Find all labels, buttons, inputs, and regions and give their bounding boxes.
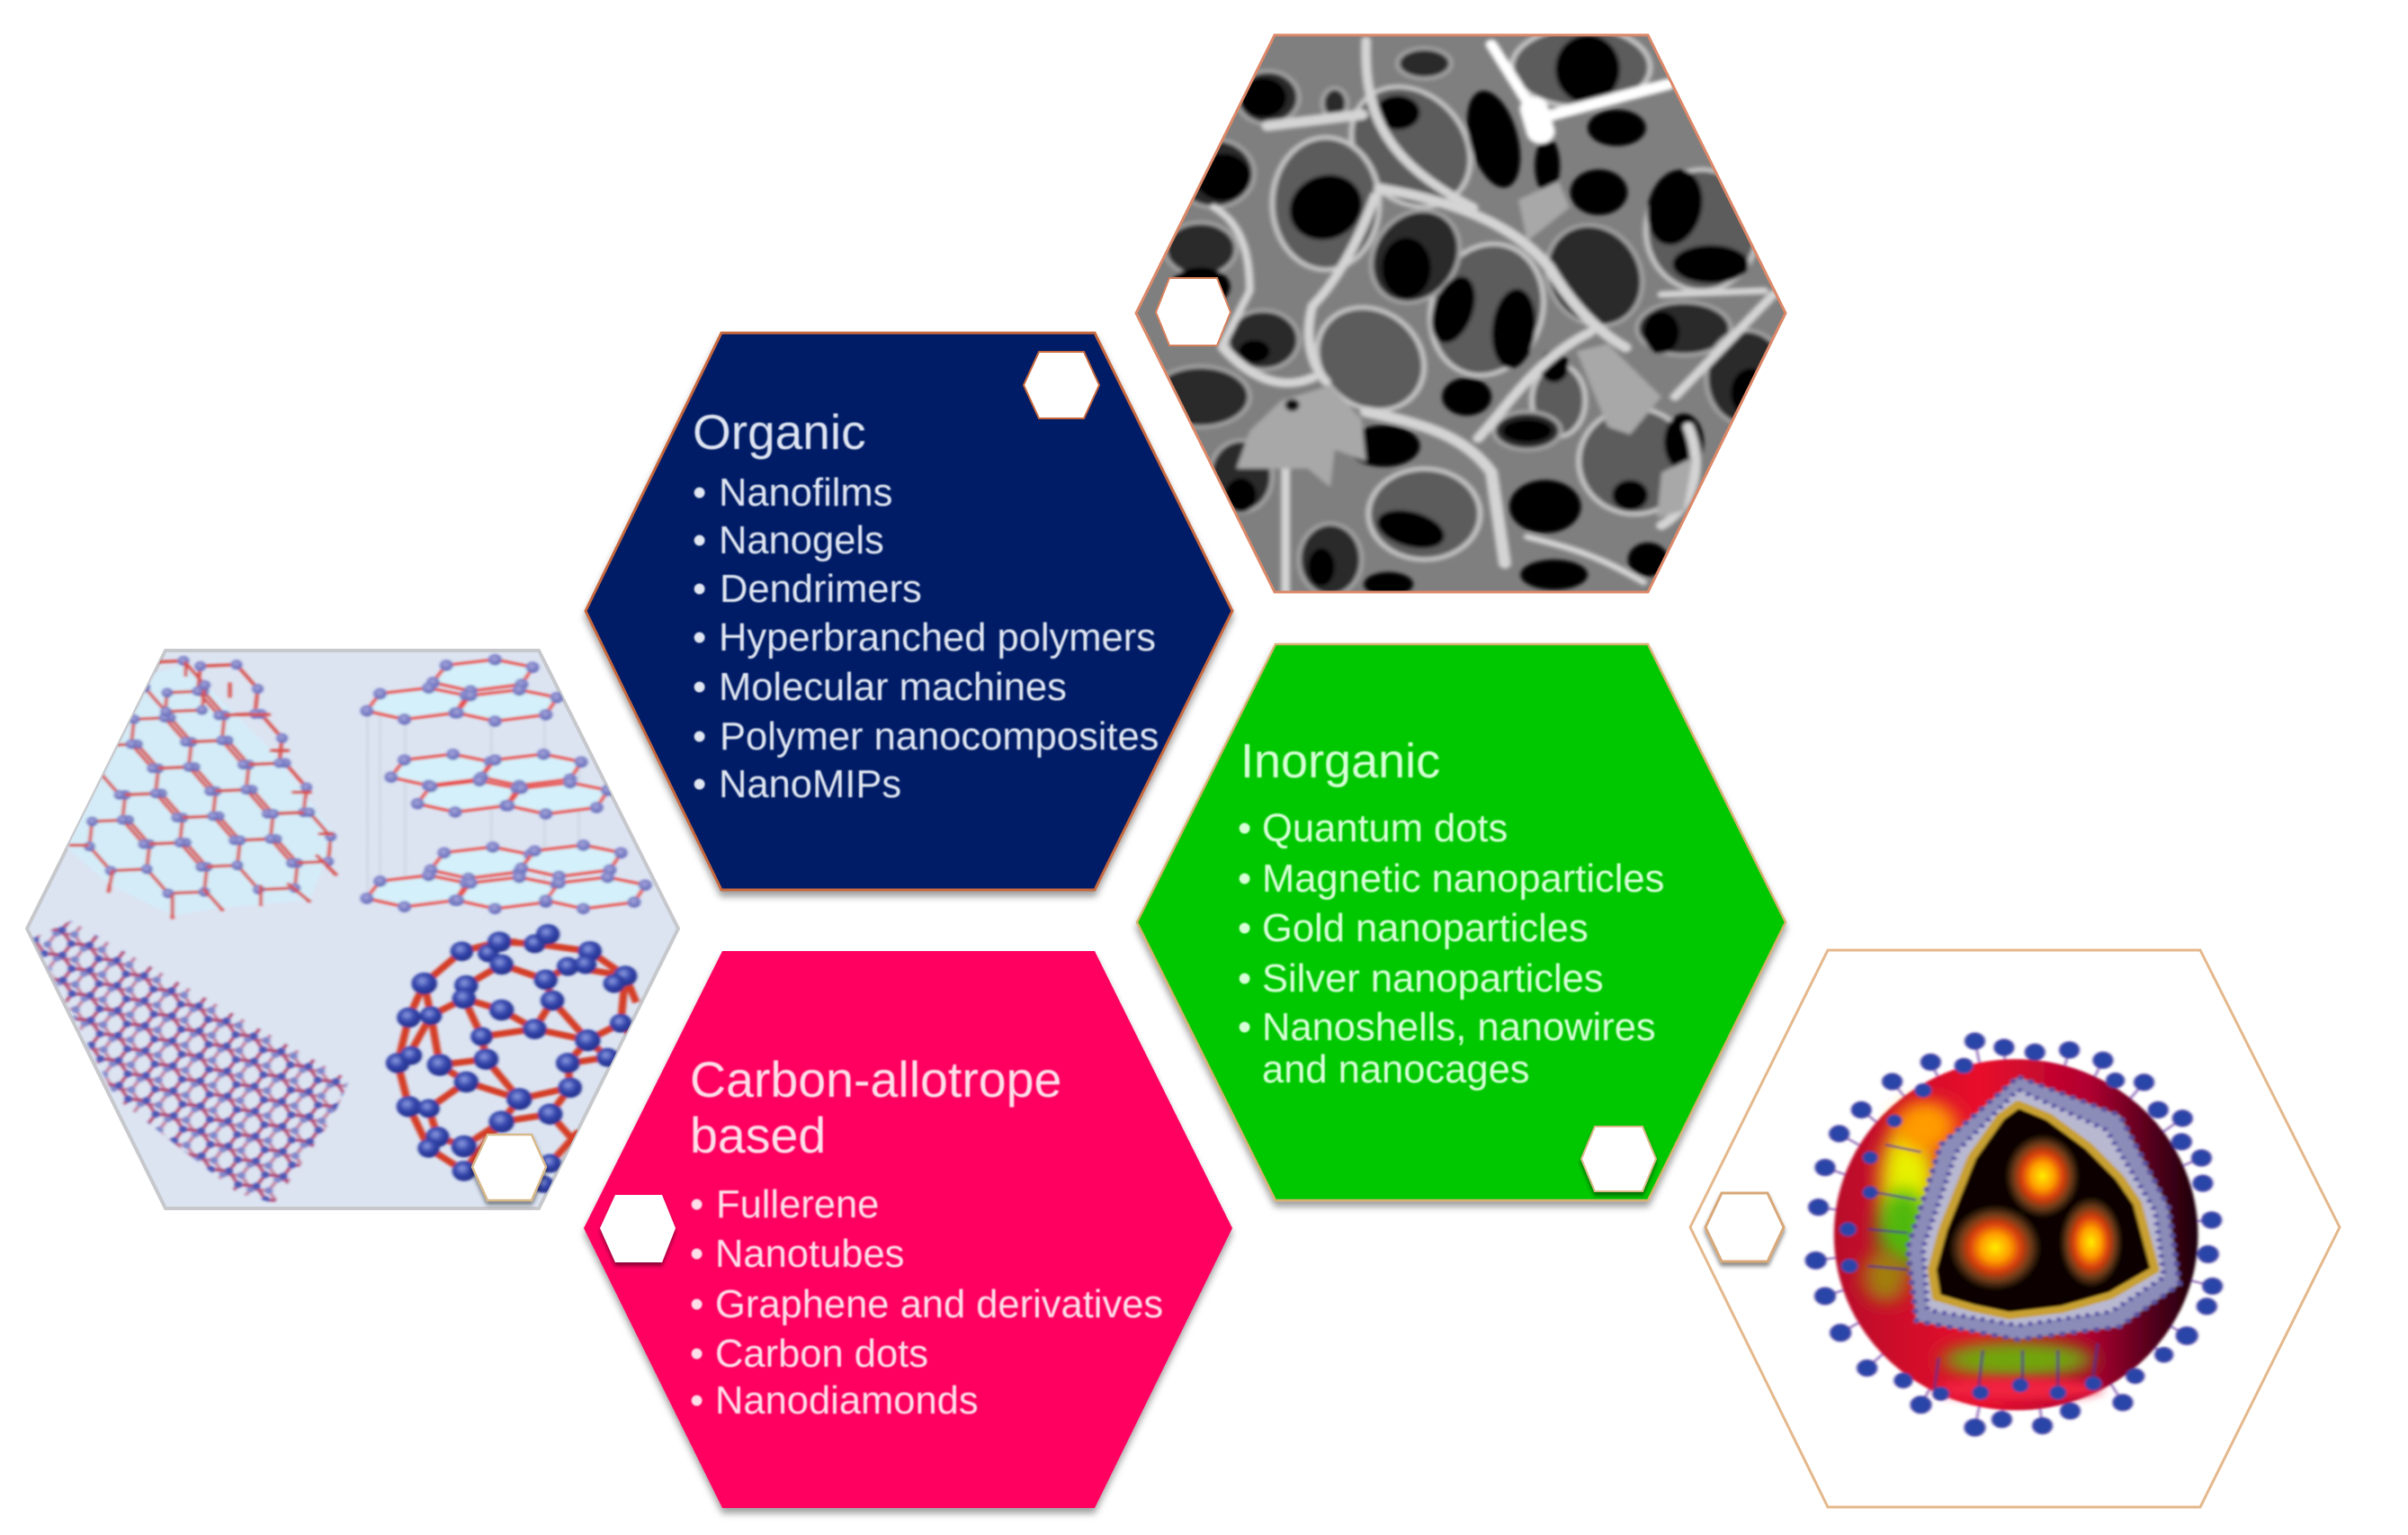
badge: organic: [1024, 352, 1099, 418]
list: inorganic items: Quantum dots: [1262, 807, 1508, 850]
image panel: core-shell nanoparticle: [1690, 950, 2340, 1507]
list: organic items: •: [693, 568, 706, 611]
shell: [1834, 1059, 2198, 1410]
badge: foam panel: [1156, 278, 1231, 346]
list: carbon items: Nanodiamonds: [715, 1379, 979, 1423]
list: organic items: •: [693, 471, 706, 515]
list: inorganic items: •: [1238, 857, 1251, 901]
membrane: [1908, 1077, 2180, 1340]
badge: nanoparticle panel: [1705, 1193, 1784, 1261]
list: organic items: Nanogels: [719, 519, 884, 562]
list: inorganic items: and nanocages: [1262, 1048, 1530, 1091]
list: inorganic items: •: [1238, 957, 1251, 1001]
list: organic items: Dendrimers: [720, 568, 922, 611]
list: carbon items: Nanotubes: [715, 1233, 904, 1276]
list: carbon items: •: [690, 1183, 703, 1226]
core: [1932, 1104, 2155, 1315]
list: organic items: •: [693, 519, 706, 562]
heading: Carbon-allotrope based: Carbon-allotrope: [690, 1052, 1061, 1108]
list: carbon items: •: [690, 1379, 703, 1423]
list: inorganic items: •: [1238, 907, 1251, 950]
list: organic items: •: [693, 616, 706, 660]
list: inorganic items: Silver nanoparticles: [1262, 957, 1604, 1001]
panel: carbon-allotrope based: [584, 951, 1232, 1508]
list: organic items: •: [693, 763, 706, 806]
list: inorganic items: •: [1238, 1006, 1251, 1049]
list: organic items: Hyperbranched polymers: [719, 616, 1156, 660]
list: organic items: Molecular machines: [719, 666, 1067, 709]
graphene sheet: [67, 656, 336, 919]
list: inorganic items: •: [1238, 807, 1251, 850]
list: inorganic items: Nanoshells, nanowires: [1262, 1006, 1656, 1049]
heading: Carbon-allotrope based: [690, 1052, 1061, 1163]
list: carbon items: •: [690, 1233, 703, 1276]
fullerene: [386, 924, 637, 1193]
image panel: carbon allotrope structures: [27, 651, 678, 1264]
list: organic items: NanoMIPs: [719, 763, 901, 806]
list: inorganic items: Magnetic nanoparticles: [1262, 857, 1664, 901]
image panel: porous foam micrograph: [1133, 20, 1790, 597]
heading: Inorganic: Inorganic: [1240, 734, 1440, 788]
list: organic items: •: [693, 666, 706, 709]
list: organic items: Nanofilms: [719, 471, 892, 515]
ligands: [1805, 1033, 2222, 1436]
list: carbon items: Carbon dots: [715, 1333, 928, 1376]
list: carbon items: [690, 1183, 1163, 1423]
heading: Organic: Organic: [693, 404, 866, 460]
nanotube: [32, 920, 349, 1204]
list: organic items: •: [693, 715, 706, 759]
badge: graphene panel: [472, 1135, 546, 1200]
list: organic items: Polymer nanocomposites: [720, 715, 1159, 759]
spikes: [1816, 1041, 2213, 1428]
list: inorganic items: Gold nanoparticles: [1262, 907, 1589, 950]
list: carbon items: •: [690, 1333, 703, 1376]
heading: Carbon-allotrope based: based: [690, 1108, 826, 1163]
panel: inorganic: [1137, 644, 1786, 1200]
panel: organic: [586, 333, 1232, 890]
list: carbon items: •: [690, 1283, 703, 1326]
list: inorganic items: [1238, 807, 1664, 1091]
badge: carbon: [600, 1195, 676, 1262]
list: carbon items: Graphene and derivatives: [715, 1283, 1163, 1326]
list: carbon items: Fullerene: [716, 1183, 879, 1226]
badge: inorganic: [1581, 1127, 1656, 1191]
graphite layers: [360, 654, 652, 914]
list: organic items: [693, 471, 1159, 806]
